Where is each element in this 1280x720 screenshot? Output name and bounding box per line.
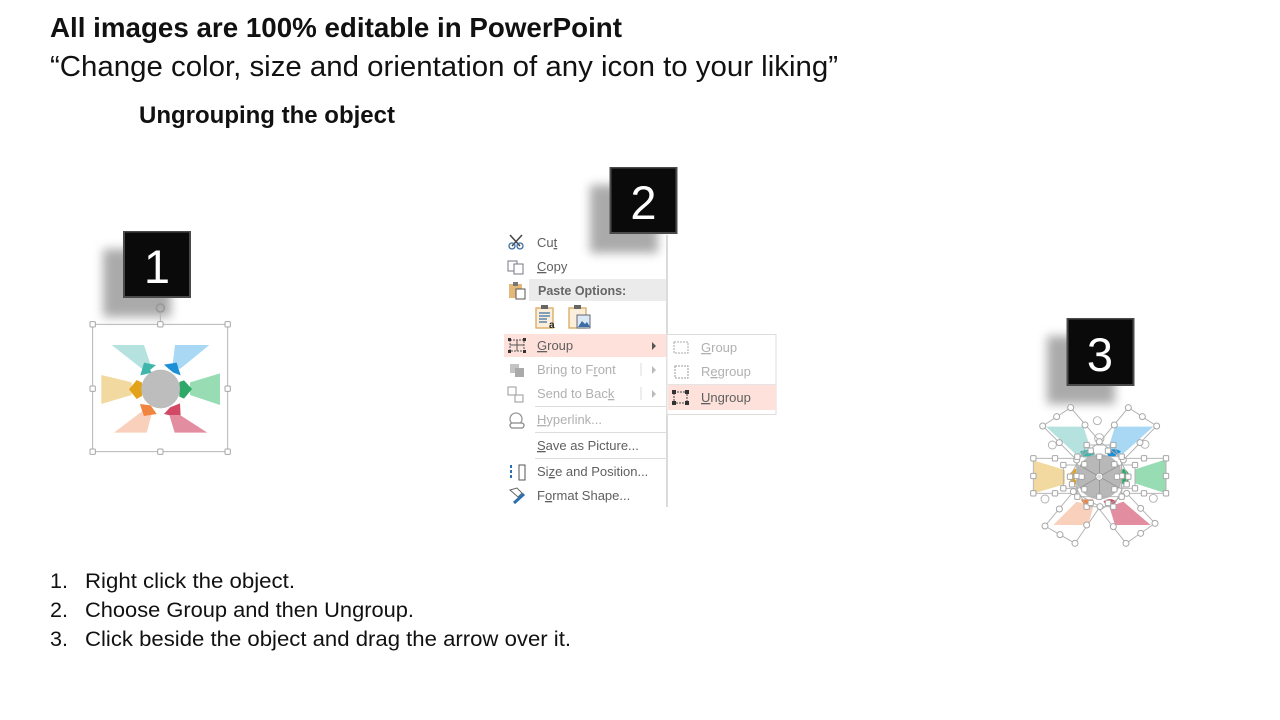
step 1 badge: 1 [144,240,170,293]
paste options header [509,279,666,301]
step 2 badge: 2 [630,176,657,229]
selection handles [1031,405,1169,546]
blue arrow [164,345,209,375]
step 1 grouped object [90,304,230,454]
menu item: hyperlink: Hyperlink... [537,412,602,427]
menu item: copy [508,259,568,274]
step 3 text: Click beside the object and drag the arrow over it. [85,627,571,651]
subtitle: “Change color, size and orientation of any icon to your liking” [50,51,838,83]
step 1 text: 1. [50,569,68,593]
step 3 ungrouped object [1031,405,1169,546]
pink arrow [164,403,207,433]
title: All images are 100% editable in PowerPoint [50,12,622,43]
centre hexagon [1070,445,1128,507]
menu item: group highlighted [504,334,666,357]
menu item: save as picture: Save as Picture... [537,438,639,453]
selection outlines [1033,408,1166,543]
menu item: send to back: Send to Back [537,386,615,401]
submenu [667,334,776,414]
menu item: group highlighted: Group [537,338,573,353]
step 3 badge [1047,318,1134,404]
paste icons [536,305,590,331]
menu item: size and position: Size and Position... [537,464,648,479]
peach arrow [114,404,157,433]
menu item: cut: Cut [537,235,558,250]
menu item: send to back [508,386,656,402]
instruction list [50,569,571,651]
teal shape [1046,427,1095,457]
step 2 badge [590,167,678,253]
step 2 text: Choose Group and then Ungroup. [85,598,414,622]
step 3 text: 3. [50,627,68,651]
step 3 badge: 3 [1087,328,1113,381]
paste icons: a [549,320,555,331]
green shape [1121,459,1166,493]
menu item: cut [509,235,558,250]
selection frame [90,322,230,454]
blue shape [1106,427,1153,456]
menu item: hyperlink [510,412,602,428]
menu item: copy: Copy [537,259,568,274]
submenu item: group: Group [701,340,737,355]
yellow arrow [101,375,142,404]
submenu item: regroup: Regroup [701,364,751,379]
rotation handle [156,304,164,324]
peach shape [1053,499,1093,525]
centre circle [141,370,180,408]
rotation handles [1041,417,1157,503]
section heading: Ungrouping the object [139,102,395,129]
paste options header: Paste Options: [538,284,626,298]
context menu [504,235,667,507]
step 1 badge [103,231,191,317]
menu item: bring to front [510,362,656,377]
menu item: format shape: Format Shape... [537,488,630,503]
menu item: bring to front: Bring to Front [537,362,616,377]
green arrow [179,373,220,405]
step 1 text: Right click the object. [85,569,295,593]
teal arrow [112,345,156,375]
step 2 text: 2. [50,598,68,622]
submenu item: ungroup highlighted: Ungroup [701,390,751,405]
yellow shape [1034,461,1076,493]
pink shape [1103,499,1151,525]
